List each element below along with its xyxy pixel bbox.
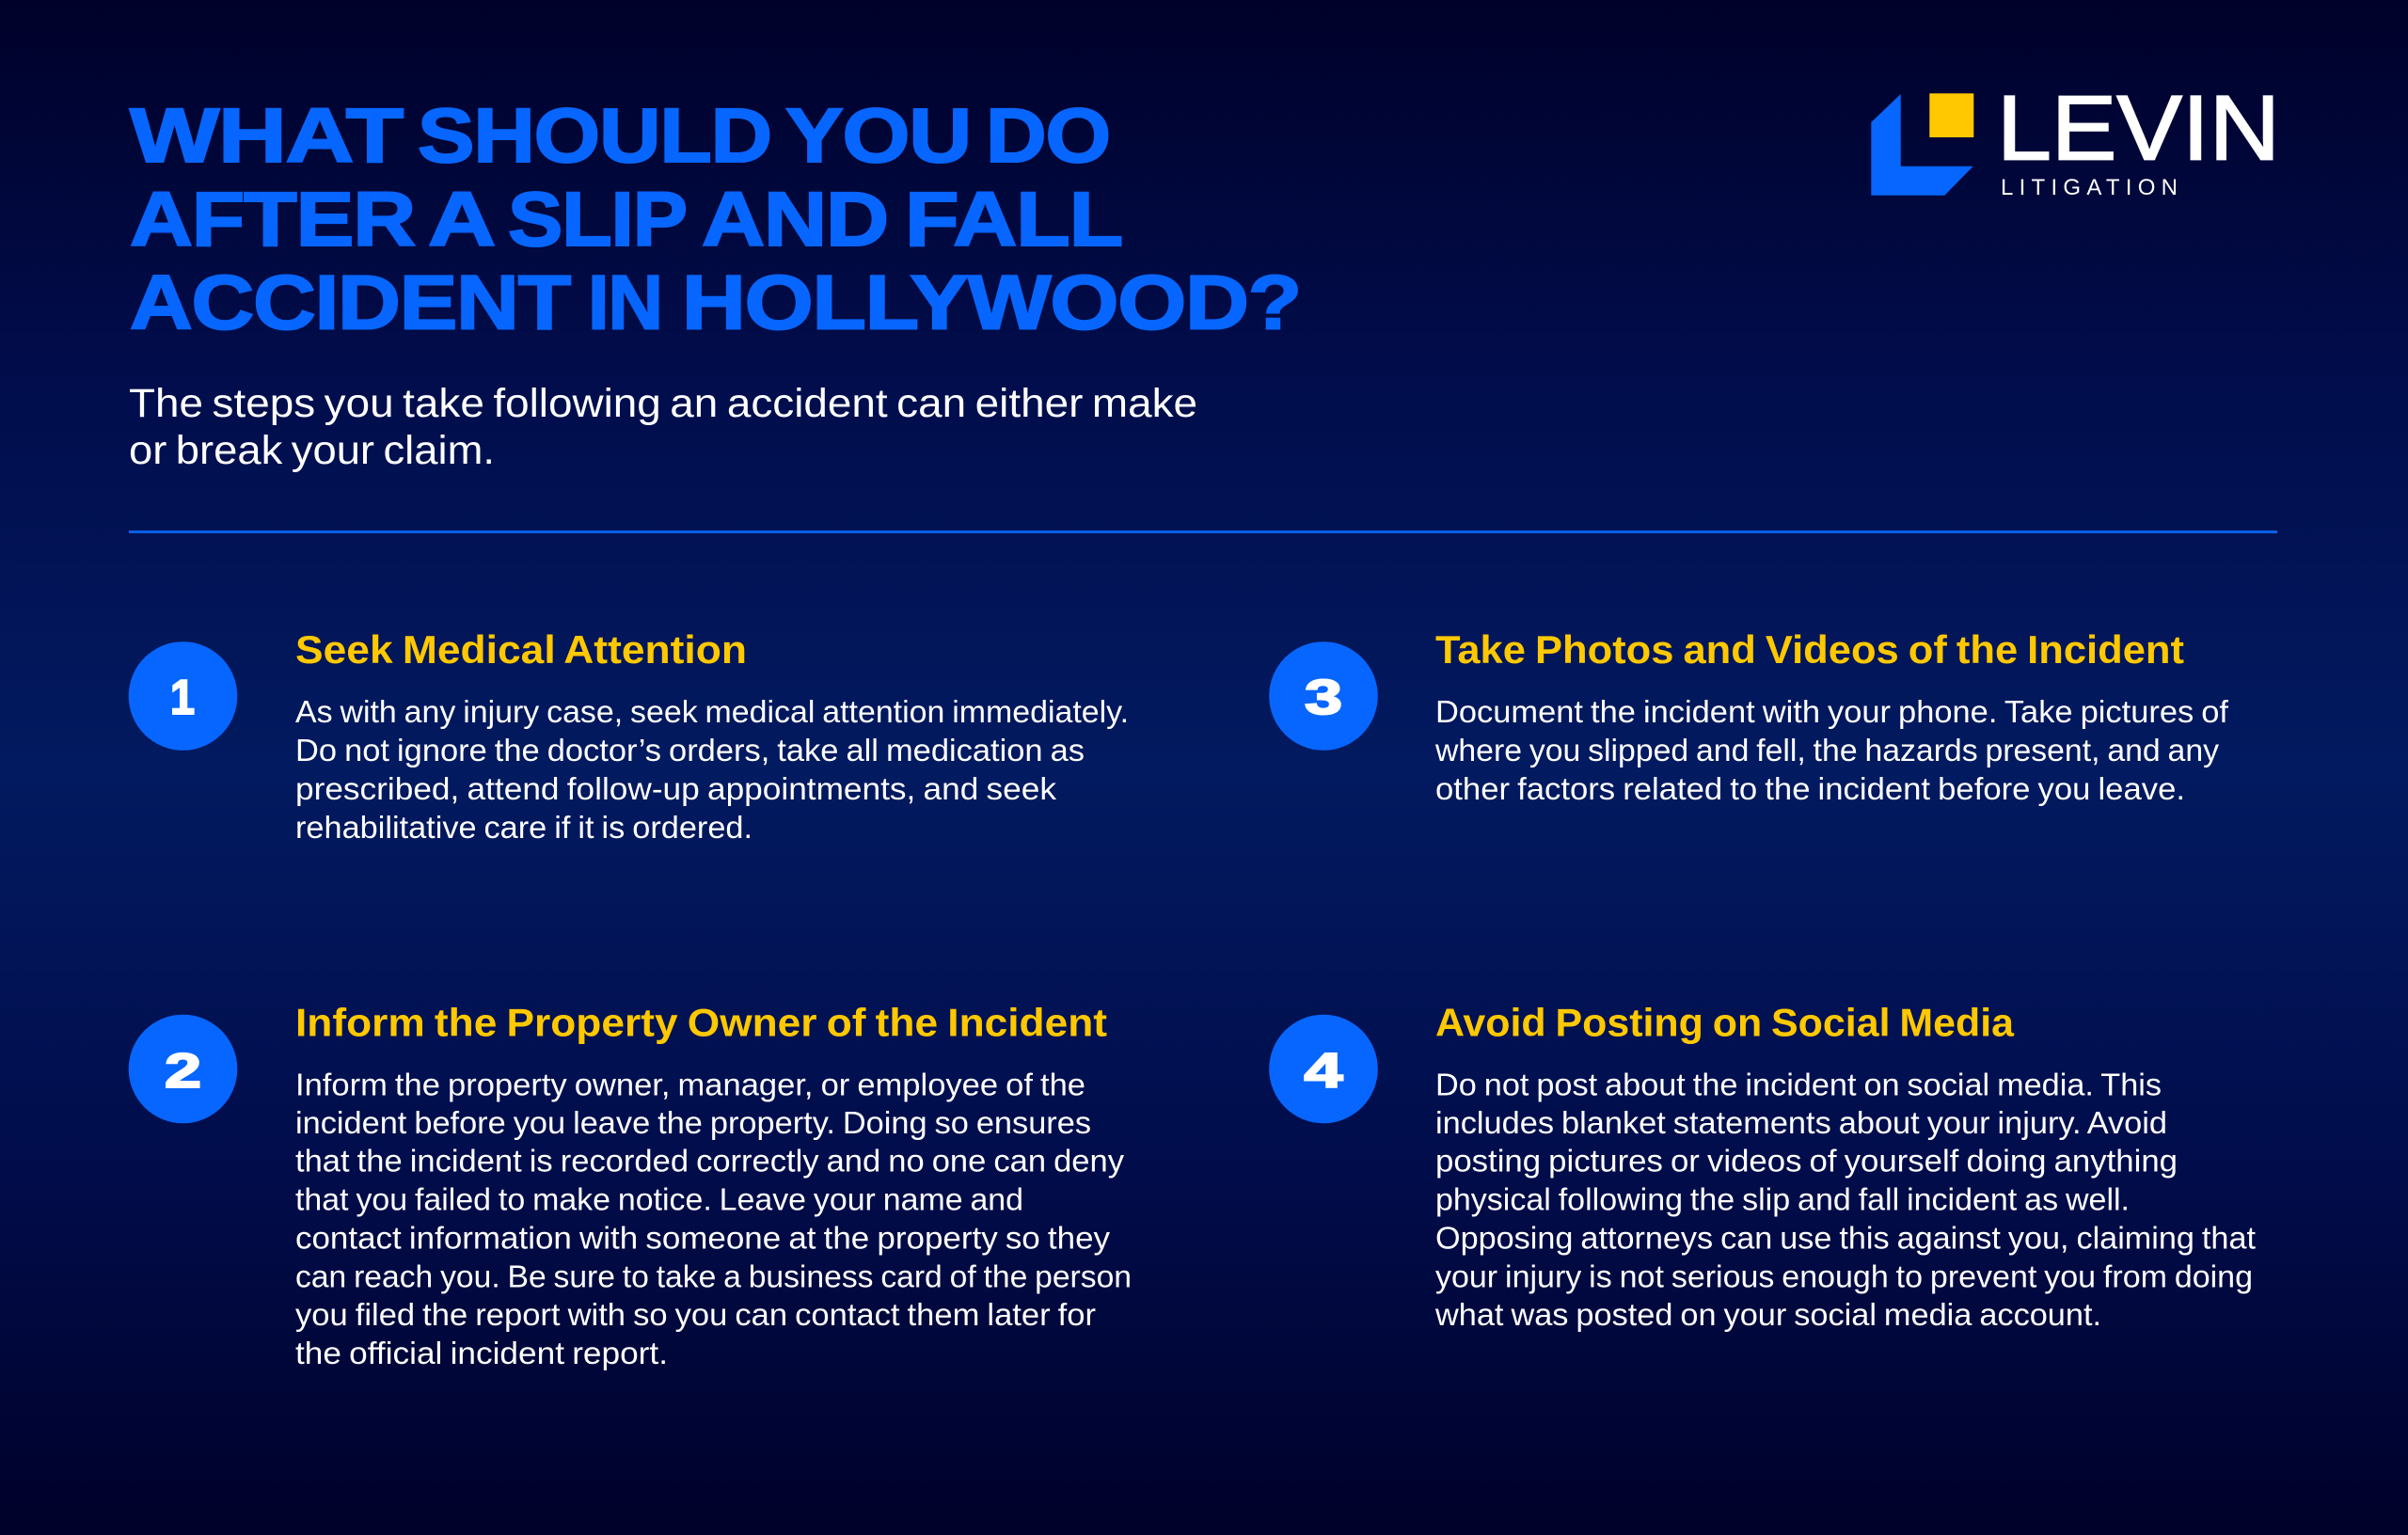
- heading 4: Avoid Posting on Social Media: [1435, 1001, 2015, 1044]
- number badge 2: 2: [165, 1044, 201, 1099]
- number badge 4: [1269, 1015, 1378, 1123]
- subtitle: The steps you take following an accident can either make: [129, 381, 1197, 426]
- step 4: [1269, 1001, 2257, 1333]
- body text 2: that the incident is recorded correctly and no one can deny: [295, 1145, 1124, 1179]
- body text 4: Do not post about the incident on social media. This: [1435, 1068, 2162, 1102]
- body text 2: you filed the report with so you can contact them later for: [295, 1298, 1096, 1333]
- heading 3: Take Photos and Videos of the Incident: [1435, 627, 2184, 672]
- title: DO: [986, 93, 1110, 179]
- title: AND: [702, 177, 888, 262]
- title: HOLLYWOOD?: [682, 260, 1301, 346]
- body text 3: [1434, 695, 2229, 807]
- step 2: [129, 1001, 1132, 1371]
- logo icon: yellow square: [1929, 93, 1973, 137]
- step 1: [129, 627, 1129, 846]
- body text 2: Inform the property owner, manager, or employee of the: [295, 1068, 1085, 1102]
- body text 2: the official incident report.: [295, 1337, 668, 1371]
- body text 1: Do not ignore the doctor’s orders, take all medication as: [295, 734, 1085, 768]
- number badge 4: 4: [1304, 1044, 1343, 1099]
- body text 2: [295, 1068, 1132, 1371]
- body text 3: Document the incident with your phone. Take pictures of: [1435, 695, 2229, 730]
- logo icon: blue L shape: [1871, 94, 1973, 196]
- number badge 1: [129, 641, 237, 751]
- heading 2: Inform the Property Owner of the Incident: [295, 1001, 1107, 1044]
- number badge 1: 1: [170, 671, 195, 725]
- subtitle: [129, 381, 1197, 473]
- logo wordmark: LEVIN: [1997, 77, 2280, 179]
- title: SLIP: [508, 177, 687, 262]
- body text 1: rehabilitative care if it is ordered.: [295, 811, 752, 846]
- step 3: [1269, 627, 2229, 807]
- body text 1: As with any injury case, seek medical attention immediately.: [295, 695, 1129, 730]
- title: FALL: [905, 177, 1122, 262]
- body text 1: prescribed, attend follow-up appointments, and seek: [295, 772, 1056, 807]
- title: [130, 93, 1301, 346]
- body text 2: can reach you. Be sure to take a business card of the person: [295, 1259, 1132, 1294]
- body text 4: what was posted on your social media account.: [1434, 1298, 2101, 1333]
- body text 4: posting pictures or videos of yourself doing anything: [1435, 1145, 2178, 1179]
- title: AFTER: [130, 177, 415, 262]
- number badge 3: [1269, 641, 1378, 751]
- body text 3: other factors related to the incident before you leave.: [1435, 772, 2185, 807]
- body text 4: [1434, 1068, 2257, 1333]
- title: YOU: [785, 93, 971, 179]
- body text 4: Opposing attorneys can use this against you, claiming that: [1435, 1221, 2257, 1257]
- title: SHOULD: [418, 93, 771, 179]
- title: WHAT: [130, 93, 404, 179]
- body text 4: physical following the slip and fall incident as well.: [1435, 1183, 2130, 1218]
- body text 4: includes blanket statements about your injury. Avoid: [1435, 1106, 2167, 1141]
- body text 2: incident before you leave the property. Doing so ensures: [295, 1106, 1091, 1141]
- logo: Levin Litigation: [1871, 77, 2280, 200]
- body text 4: your injury is not serious enough to prevent you from doing: [1435, 1259, 2253, 1294]
- number badge 3: 3: [1305, 671, 1342, 725]
- number badge 2: [129, 1015, 237, 1123]
- title: A: [428, 177, 495, 262]
- title: ACCIDENT: [130, 260, 571, 346]
- title: IN: [588, 260, 662, 346]
- body text 1: [295, 695, 1129, 846]
- body text 3: where you slipped and fell, the hazards present, and any: [1434, 734, 2219, 768]
- body text 2: contact information with someone at the property so they: [295, 1221, 1110, 1257]
- body text 2: that you failed to make notice. Leave your name and: [295, 1183, 1023, 1218]
- heading 1: Seek Medical Attention: [295, 627, 747, 672]
- logo tagline: LITIGATION: [2001, 175, 2178, 200]
- subtitle: or break your claim.: [129, 428, 495, 473]
